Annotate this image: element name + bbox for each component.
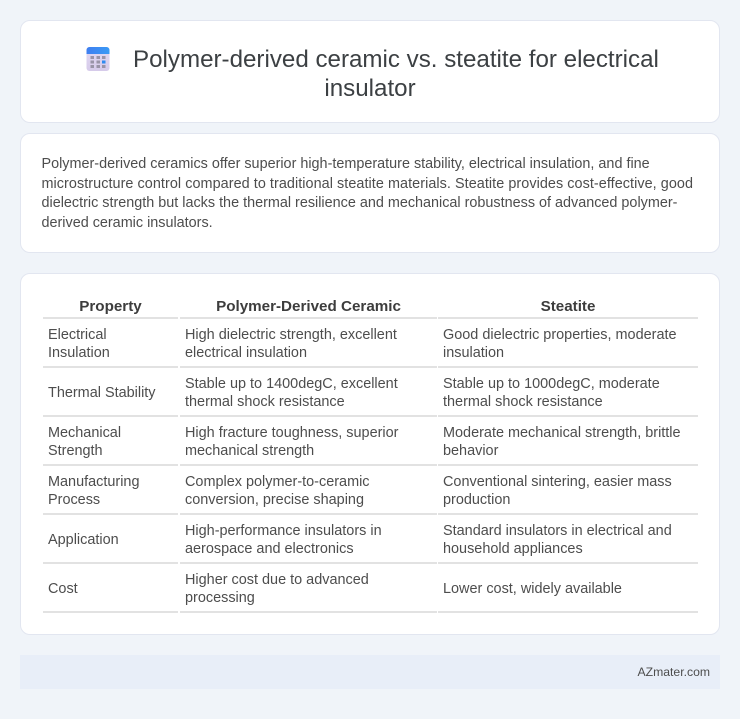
- panel: comparison table: [20, 273, 720, 635]
- row: cost: processing: [185, 590, 255, 606]
- row: manufacturing process: Complex polymer-to-ceramic: [185, 474, 370, 490]
- row: cost: Cost: [48, 581, 78, 597]
- row: cost: [48, 572, 622, 606]
- row: mechanical strength: behavior: [443, 443, 498, 459]
- footer bar: [20, 655, 720, 689]
- footer brand text: AZmater.com: [638, 665, 710, 679]
- row: electrical insulation: Insulation: [48, 345, 110, 361]
- row: manufacturing process: Manufacturing: [48, 474, 140, 490]
- row: application: Standard insulators in electrical and: [443, 523, 672, 539]
- text block: summary: dielectric strength but lacks the thermal resilience and mechanical robustness of advanced polymer-: [42, 195, 677, 211]
- row: mechanical strength: [48, 425, 681, 459]
- row: thermal stability: thermal shock resistance: [185, 394, 345, 410]
- row: manufacturing process: conversion, precise shaping: [185, 492, 364, 508]
- row: manufacturing process: production: [443, 492, 510, 508]
- text block: summary: [42, 156, 693, 231]
- row: application: High-performance insulators in: [185, 523, 382, 539]
- row: manufacturing process: Conventional sintering, easier mass: [443, 474, 672, 490]
- row: application: aerospace and electronics: [185, 541, 354, 557]
- row: mechanical strength: Mechanical: [48, 425, 121, 441]
- text block: summary: derived ceramic insulators.: [42, 215, 213, 231]
- row: application: household appliances: [443, 541, 583, 557]
- title: [133, 46, 659, 102]
- text block: summary: microstructure control compared to traditional steatite materials. Steatite provides cost-effective, good: [42, 176, 693, 192]
- row: thermal stability: Stable up to 1000degC, moderate: [443, 376, 660, 392]
- panel: introduction: [20, 133, 720, 253]
- row: electrical insulation: Electrical: [48, 327, 107, 343]
- row: thermal stability: thermal shock resistance: [443, 394, 603, 410]
- row: application: [48, 523, 672, 557]
- title: Polymer-derived ceramic vs. steatite for electrical: [133, 46, 659, 73]
- row: electrical insulation: [48, 327, 677, 361]
- row: mechanical strength: High fracture toughness, superior: [185, 425, 398, 441]
- row: electrical insulation: Good dielectric properties, moderate: [443, 327, 677, 343]
- icon: calendar grid: [86, 47, 110, 71]
- row: cost: Lower cost, widely available: [443, 581, 622, 597]
- row: electrical insulation: High dielectric strength, excellent: [185, 327, 397, 343]
- row: mechanical strength: mechanical strength: [185, 443, 314, 459]
- row: application: Application: [48, 532, 119, 548]
- table header: polymer-derived ceramic: Polymer-Derived Ceramic: [216, 298, 401, 315]
- title: insulator: [324, 75, 416, 102]
- panel: title card: [20, 20, 720, 123]
- table header: steatite: Steatite: [541, 298, 595, 315]
- row: electrical insulation: electrical insulation: [185, 345, 307, 361]
- table header: property: Property: [79, 298, 142, 315]
- row: mechanical strength: Moderate mechanical strength, brittle: [443, 425, 681, 441]
- row: thermal stability: [48, 376, 660, 410]
- row: mechanical strength: Strength: [48, 443, 103, 459]
- row: cost: Higher cost due to advanced: [185, 572, 369, 588]
- row: thermal stability: Thermal Stability: [48, 385, 156, 401]
- row: manufacturing process: [48, 474, 672, 508]
- text block: summary: Polymer-derived ceramics offer superior high-temperature stability, electrical insulation, and fine: [42, 156, 650, 172]
- row: manufacturing process: Process: [48, 492, 100, 508]
- row: electrical insulation: insulation: [443, 345, 504, 361]
- row: thermal stability: Stable up to 1400degC, excellent: [185, 376, 398, 392]
